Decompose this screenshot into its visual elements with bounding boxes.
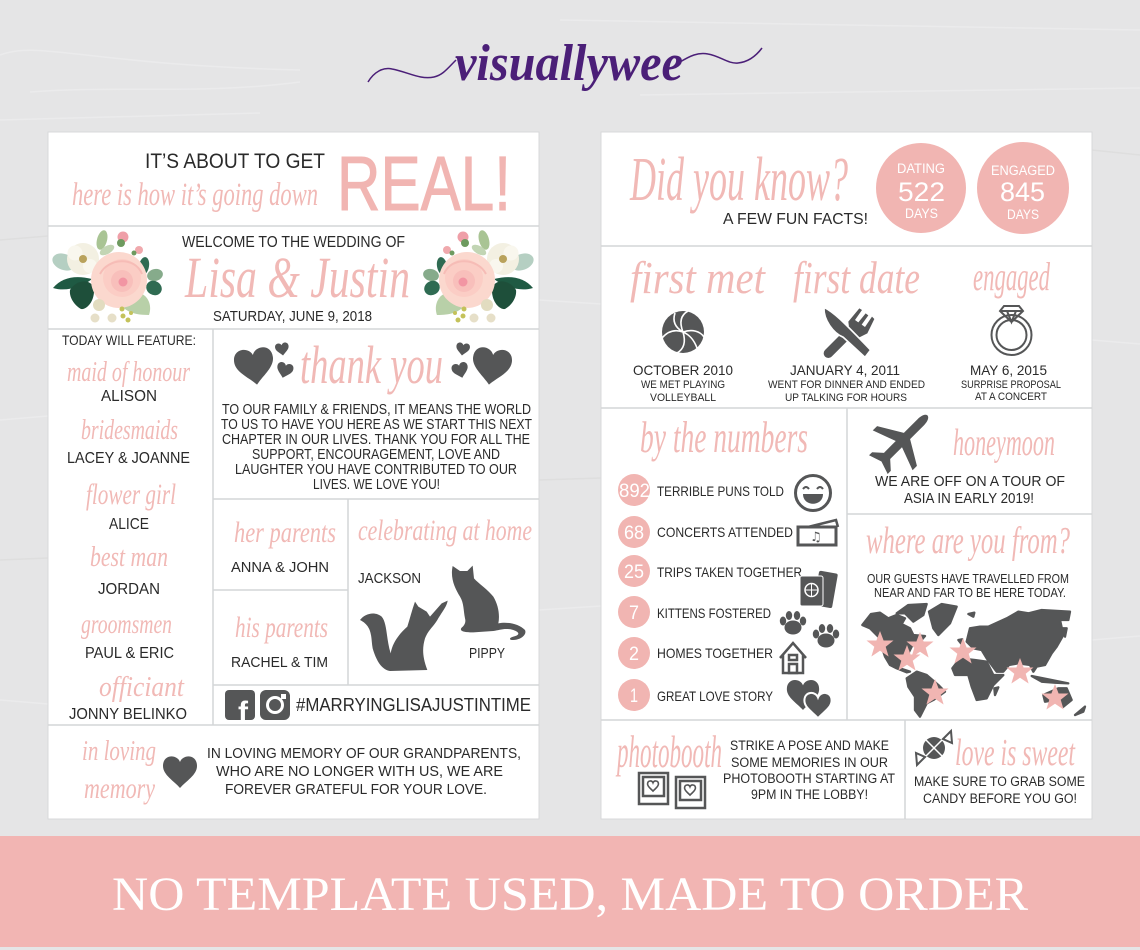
panel: wedding party: PAUL & ERIC	[85, 645, 174, 662]
row: homes: HOMES TOGETHER	[657, 645, 773, 661]
row: concerts	[618, 516, 838, 548]
panel: first date	[768, 252, 925, 404]
panel: engaged	[961, 254, 1061, 403]
panel: in loving memory: memory	[84, 772, 155, 805]
floral right	[422, 229, 536, 322]
memorial message	[207, 745, 521, 798]
panel: photobooth: photobooth	[615, 726, 722, 777]
panel: love is sweet: MAKE SURE TO GRAB SOME	[914, 774, 1085, 789]
row: puns	[618, 474, 830, 510]
panel: social	[225, 690, 531, 729]
thank you message: CHAPTER IN OUR LIVES. THANK YOU FOR ALL THE	[222, 432, 530, 448]
panel: photobooth	[615, 726, 895, 808]
map markers	[866, 631, 1068, 710]
panel: by the numbers	[618, 413, 839, 718]
panel: photobooth: STRIKE A POSE AND MAKE	[730, 738, 889, 753]
row: concerts: 68	[624, 523, 644, 544]
panel: first met: first met	[630, 252, 766, 303]
row: love story: 1	[630, 686, 638, 707]
card divider lines	[48, 226, 539, 725]
icon: fork and knife	[824, 307, 874, 357]
header line: IT’S ABOUT TO GET	[145, 150, 325, 173]
world map	[862, 604, 1085, 717]
thank you message: LAUGHTER YOU HAVE CONTRIBUTED TO OUR	[235, 462, 517, 478]
icon: two hearts	[787, 680, 832, 718]
icon: house	[780, 643, 806, 673]
icon: ring	[992, 306, 1032, 355]
thank you message	[221, 402, 532, 493]
panel: wedding party: officiant	[99, 671, 185, 703]
big word REAL: REAL!	[337, 141, 511, 227]
stat: engaged: ENGAGED	[991, 163, 1055, 178]
script subtitle: here is how it’s going down	[72, 177, 318, 213]
panel: photobooth: SOME MEMORIES IN OUR	[731, 755, 888, 770]
thank you message: TO OUR FAMILY & FRIENDS, IT MEANS THE WORLD	[222, 402, 531, 418]
icon: instagram	[260, 690, 290, 720]
panel: wedding party: JORDAN	[98, 581, 160, 598]
panel: first date: first date	[793, 252, 920, 303]
row: love story	[618, 679, 832, 718]
panel: header	[72, 141, 511, 227]
panel: where are you from: OUR GUESTS HAVE TRAVELLED FROM	[867, 572, 1069, 586]
icon: volleyball	[662, 311, 704, 353]
panel: where are you from: NEAR AND FAR TO BE HERE TODAY.	[874, 586, 1066, 600]
icon: airplane	[858, 396, 947, 485]
icon: tickets: ♫	[810, 530, 822, 545]
panel: honeymoon: ASIA IN EARLY 2019!	[904, 490, 1034, 507]
right card	[601, 132, 1092, 819]
panel: first date: UP TALKING FOR HOURS	[785, 392, 907, 404]
icon: facebook: f	[238, 696, 249, 729]
icon: cat left	[360, 601, 448, 671]
panel: his parents	[231, 611, 328, 671]
panel: did you know: A FEW FUN FACTS!	[723, 211, 868, 228]
card divider lines	[601, 246, 1092, 819]
row: puns: 892	[619, 481, 650, 502]
thank you message: LIVES. WE LOVE YOU!	[313, 477, 440, 493]
panel: first met	[630, 252, 766, 404]
icon: candy	[916, 731, 952, 765]
panel: wedding party: maid of honour	[67, 357, 190, 388]
panel: engaged: AT A CONCERT	[975, 391, 1047, 403]
icon: tickets	[798, 520, 838, 545]
row: kittens	[618, 596, 839, 648]
icon: laughing face	[796, 476, 830, 510]
panel: honeymoon	[858, 396, 1065, 507]
panel: engaged: engaged	[973, 254, 1051, 299]
floral left	[50, 229, 164, 322]
panel: photobooth: 9PM IN THE LOBBY!	[751, 787, 868, 802]
stat: dating	[876, 143, 966, 233]
thank you message: TO US TO HAVE YOU HERE AS WE START THIS NEXT	[221, 417, 532, 433]
panel: by the numbers: by the numbers	[640, 413, 808, 462]
panel: first date: JANUARY 4, 2011	[790, 362, 900, 378]
icon: cat right	[452, 566, 525, 640]
panel: wedding party: groomsmen	[81, 609, 172, 639]
panel: wedding party	[62, 332, 196, 723]
panel: her parents: ANNA & JOHN	[231, 560, 329, 576]
party heading: TODAY WILL FEATURE:	[62, 332, 196, 348]
thank you heading: thank you	[300, 335, 443, 395]
panel: her parents: her parents	[234, 516, 336, 549]
stat: dating: 522	[898, 177, 945, 207]
stat: dating: DATING	[897, 161, 945, 176]
panel: did you know	[629, 142, 1069, 234]
banner	[0, 836, 1140, 947]
icon: paws	[780, 611, 839, 648]
panel: photobooth: PHOTOBOOTH STARTING AT	[723, 771, 895, 786]
stat: engaged	[977, 142, 1069, 234]
panel: honeymoon: WE ARE OFF ON A TOUR OF	[875, 473, 1065, 490]
stat: engaged: 845	[1000, 177, 1045, 207]
stat: dating: DAYS	[905, 206, 938, 221]
row: kittens: KITTENS FOSTERED	[657, 605, 771, 621]
row: puns: TERRIBLE PUNS TOLD	[657, 483, 784, 499]
panel: welcome	[50, 229, 536, 325]
panel: celebrating at home: PIPPY	[469, 645, 505, 662]
memorial message: IN LOVING MEMORY OF OUR GRANDPARENTS,	[207, 745, 521, 762]
panel: wedding party: ALISON	[101, 388, 157, 405]
panel: where are you from	[862, 520, 1085, 717]
panel: celebrating at home: JACKSON	[358, 570, 421, 587]
row: trips	[618, 555, 838, 608]
panel: celebrating at home	[358, 514, 532, 671]
panel: in loving memory: in loving	[82, 736, 156, 767]
icon: heart	[163, 756, 197, 788]
panel: thank you	[221, 335, 532, 493]
welcome line: WELCOME TO THE WEDDING OF	[182, 234, 405, 251]
thank you message: SUPPORT, ENCOURAGEMENT, LOVE AND	[252, 447, 500, 463]
panel: love is sweet	[914, 731, 1085, 806]
icon: facebook	[225, 690, 255, 729]
brand logo: visuallywee: visuallywee	[455, 35, 683, 92]
row: trips: 25	[624, 562, 644, 583]
panel: her parents	[231, 516, 336, 576]
memorial message: WHO ARE NO LONGER WITH US, WE ARE	[216, 763, 503, 780]
row: kittens: 7	[629, 603, 639, 624]
panel: first met: OCTOBER 2010	[633, 362, 733, 378]
panel: wedding party: JONNY BELINKO	[69, 706, 187, 723]
panel: his parents: RACHEL & TIM	[231, 655, 328, 671]
panel: wedding party: flower girl	[86, 478, 176, 511]
panel: first date: WENT FOR DINNER AND ENDED	[768, 379, 925, 391]
stat: engaged: DAYS	[1007, 207, 1039, 222]
panel: first met: WE MET PLAYING	[641, 379, 725, 391]
panel: wedding party: LACEY & JOANNE	[67, 450, 190, 467]
memorial message: FOREVER GRATEFUL FOR YOUR LOVE.	[225, 781, 487, 798]
row: love story: GREAT LOVE STORY	[657, 688, 774, 704]
panel: first met: VOLLEYBALL	[650, 392, 716, 404]
row: homes: 2	[629, 644, 639, 665]
icon: hearts right	[451, 342, 513, 387]
panel: his parents: his parents	[235, 611, 328, 644]
icon: photo frames	[639, 773, 705, 808]
banner text: NO TEMPLATE USED, MADE TO ORDER	[112, 868, 1028, 921]
row: trips: TRIPS TAKEN TOGETHER	[657, 564, 802, 580]
panel: love is sweet: CANDY BEFORE YOU GO!	[923, 791, 1077, 806]
left card	[48, 132, 539, 819]
row: homes	[618, 637, 806, 673]
panel: wedding party: bridesmaids	[81, 415, 178, 446]
date: SATURDAY, JUNE 9, 2018	[213, 308, 372, 325]
icon: hearts left	[233, 342, 294, 387]
panel: wedding party: ALICE	[109, 516, 149, 533]
panel: did you know: Did you know?	[629, 146, 848, 214]
panel: engaged: MAY 6, 2015	[970, 362, 1047, 378]
hashtag: #MARRYINGLISAJUSTINTIME	[296, 695, 531, 715]
panel: engaged: SURPRISE PROPOSAL	[961, 379, 1061, 391]
icon: passport	[800, 571, 838, 608]
panel: in loving memory	[82, 736, 521, 805]
row: concerts: CONCERTS ATTENDED	[657, 524, 793, 540]
panel: honeymoon: honeymoon	[953, 422, 1055, 464]
panel: celebrating at home: celebrating at home	[358, 514, 532, 547]
brand logo: visuallywee	[368, 35, 762, 92]
couple names: Lisa & Justin	[184, 245, 410, 310]
panel: wedding party: best man	[90, 542, 168, 573]
